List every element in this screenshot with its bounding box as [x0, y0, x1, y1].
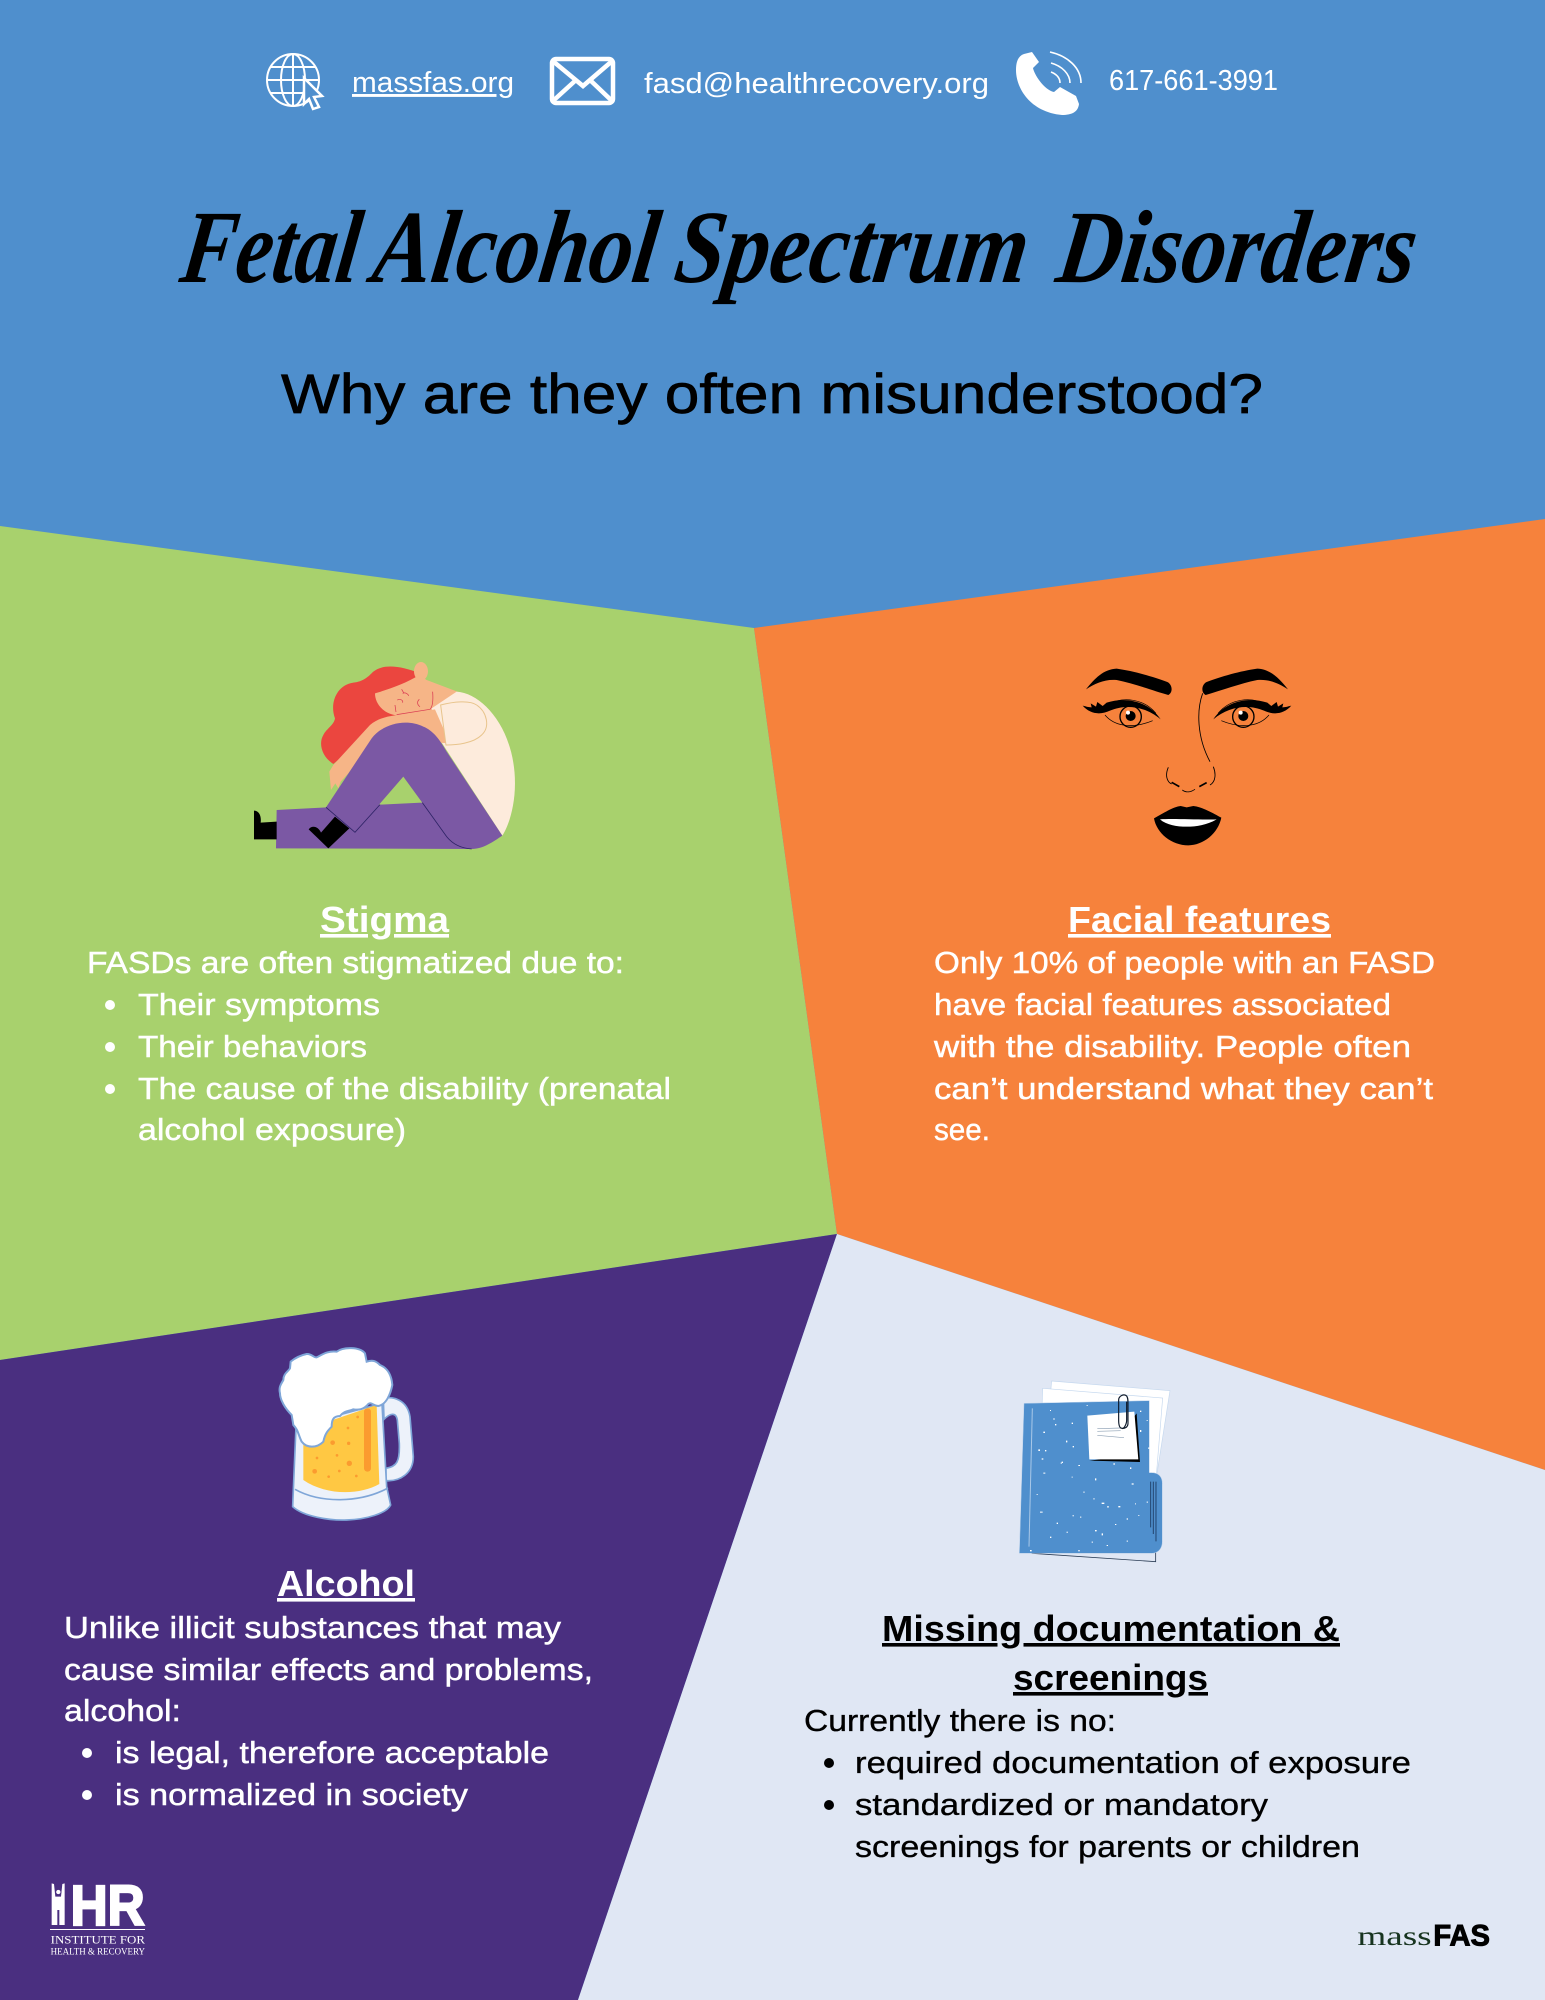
text block: missing documentation and screenings: Currently there is no: — [804, 1703, 1116, 1738]
icon: envelope — [552, 59, 613, 103]
text block: alcohol: cause similar effects and problems, — [64, 1652, 593, 1687]
heading: missing documentation and screenings — [882, 1608, 1340, 1698]
panel: alcohol — [0, 1234, 837, 2000]
logo: massFAS: mass — [1357, 1921, 1432, 1951]
text block: alcohol: Unlike illicit substances that may — [64, 1610, 562, 1645]
icon: beer mug — [280, 1348, 413, 1520]
text block: facial features — [933, 945, 1435, 1147]
text block: facial features: can’t understand what they can’t — [934, 1071, 1433, 1106]
panel: facial features — [754, 519, 1545, 1470]
icon: face — [1083, 669, 1291, 845]
text block: facial features: have facial features associated — [934, 987, 1391, 1022]
logo: massFAS — [1357, 1920, 1490, 1953]
phone number: 617-661-3991 — [1109, 65, 1278, 97]
text block: alcohol: alcohol: — [64, 1693, 181, 1728]
subtitle: Why are they often misunderstood? — [281, 362, 1263, 425]
heading: missing documentation and screenings: screenings — [1013, 1657, 1208, 1698]
text block: stigma: Their symptoms — [138, 987, 380, 1022]
text block: alcohol: is legal, therefore acceptable — [115, 1735, 549, 1770]
icon: phone — [1016, 52, 1081, 115]
logo: Institute for Health & Recovery: HR — [71, 1875, 145, 1938]
text block: missing documentation and screenings: required documentation of exposure — [855, 1745, 1411, 1780]
text block: stigma: alcohol exposure) — [138, 1112, 406, 1147]
icon: woman hugging knees — [254, 662, 515, 849]
icon: folder with papers — [1019, 1381, 1170, 1562]
icon: globe with cursor — [267, 54, 322, 109]
heading: stigma: Stigma — [320, 899, 450, 940]
contact bar — [267, 52, 1278, 115]
heading: missing documentation and screenings: Missing documentation & — [882, 1608, 1340, 1649]
title — [174, 189, 1425, 305]
left eye and brow — [1083, 669, 1172, 727]
website link: massfas.org — [352, 67, 514, 99]
text block: missing documentation and screenings: standardized or mandatory — [855, 1787, 1269, 1822]
logo: massFAS: FAS — [1433, 1920, 1490, 1953]
lips — [1154, 806, 1221, 845]
right eye and brow — [1202, 669, 1291, 727]
heading: alcohol: Alcohol — [277, 1563, 415, 1604]
text block: alcohol — [64, 1610, 593, 1812]
text block: facial features: with the disability. People often — [933, 1029, 1411, 1064]
logo: Institute for Health & Recovery — [50, 1875, 145, 1957]
panel: stigma — [0, 526, 837, 1360]
title: Disorders — [1050, 189, 1425, 305]
text block: missing documentation and screenings — [804, 1703, 1411, 1864]
nose — [1167, 693, 1215, 792]
logo: Institute for Health & Recovery: INSTITUTE FOR — [51, 1934, 145, 1946]
panel: missing documentation and screenings — [578, 1234, 1545, 2000]
title: Spectrum — [669, 189, 1037, 305]
text block: facial features: see. — [934, 1112, 990, 1147]
text block: alcohol: is normalized in society — [115, 1777, 469, 1812]
logo: Institute for Health & Recovery: HEALTH & RECOVERY — [51, 1947, 145, 1957]
heading: facial features: Facial features — [1068, 899, 1331, 940]
text block: stigma: The cause of the disability (prenatal — [138, 1071, 671, 1106]
title: Alcohol — [362, 189, 667, 305]
text block: stigma: FASDs are often stigmatized due to: — [87, 945, 624, 980]
title: Fetal — [174, 189, 369, 305]
text block: stigma: Their behaviors — [138, 1029, 367, 1064]
text block: facial features: Only 10% of people with an FASD — [934, 945, 1435, 980]
text block: stigma — [87, 945, 671, 1147]
email address: fasd@healthrecovery.org — [644, 68, 989, 100]
text block: missing documentation and screenings: screenings for parents or children — [855, 1829, 1360, 1864]
